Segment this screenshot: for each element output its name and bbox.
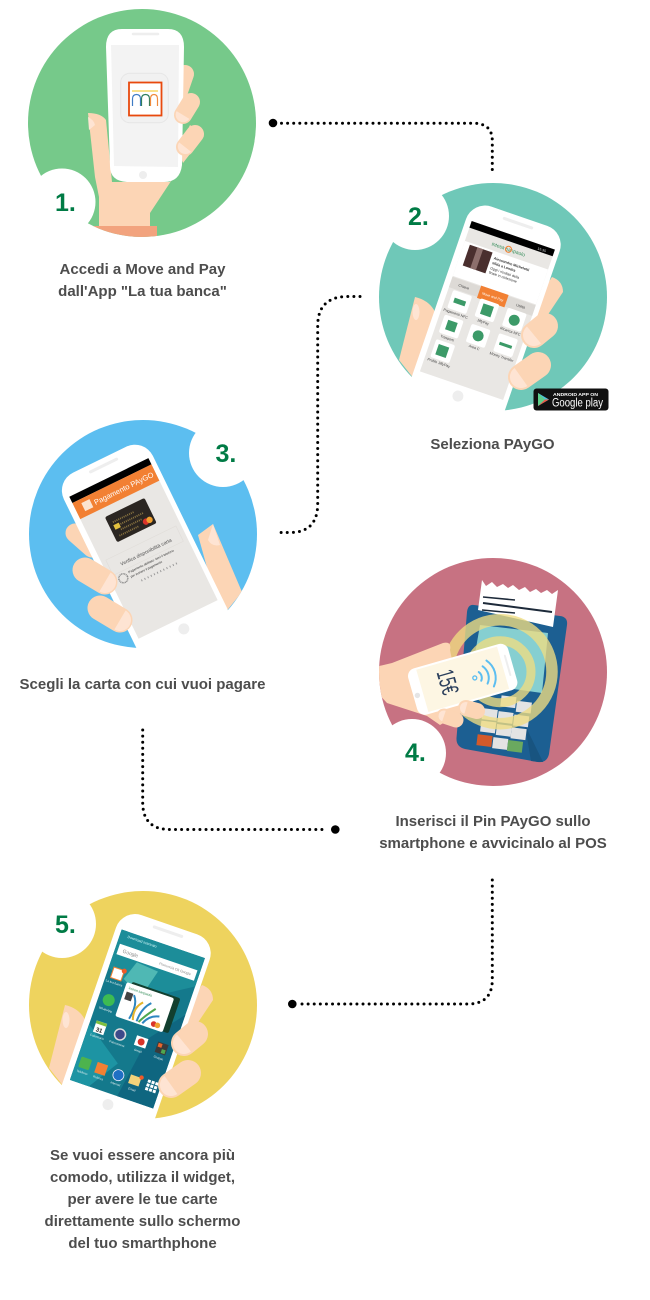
Google Play badge: Google play: [552, 398, 603, 410]
phone with app screen: Area C: [468, 344, 480, 352]
connector: step 1 to step 2: [269, 119, 492, 170]
caption 5: comodo, utilizza il widget,: [50, 1169, 235, 1186]
front fingers: [160, 1034, 195, 1096]
panel: step 2: [379, 182, 608, 453]
service tiles: [430, 289, 527, 382]
hand palm and sleeve: [88, 113, 204, 237]
contactless rings: [448, 620, 552, 724]
phone with amount: [406, 642, 519, 717]
phone with home screen: Rubrica: [93, 1074, 104, 1082]
phone with app screen: Profilo JiffyPay: [427, 357, 451, 369]
number badge 3: 3.: [216, 440, 236, 468]
phone with card screen: Pagamento abilitato: tieni il telefono: [128, 548, 175, 574]
front fingers: [85, 570, 131, 631]
phone with app screen: Utilità: [516, 303, 525, 310]
fingerprint note: [117, 572, 129, 584]
phone with home screen: WhatsApp: [98, 1005, 113, 1014]
front fingers: [510, 326, 545, 388]
caption 5: Se vuoi essere ancora più: [50, 1147, 235, 1164]
phone with home screen: Download scaricato: [127, 935, 157, 949]
payment card: [105, 498, 157, 542]
Google Play badge: ANDROID APP ON: [553, 392, 598, 397]
tabs: [449, 277, 536, 316]
phone with app screen: JiffyPay: [476, 318, 490, 326]
keypad: [476, 693, 532, 753]
number badge 4: [378, 719, 446, 787]
panel: step 3: [20, 419, 265, 693]
phone with app screen: [404, 200, 566, 430]
phone with home screen: Internet: [110, 1080, 121, 1087]
phone with app screen: Pagamenti NFC: [443, 308, 469, 320]
phone: [106, 29, 184, 182]
phone with card screen: per avviare il pagamento: [130, 560, 163, 579]
phone with home screen: La tua banca: [105, 978, 123, 988]
phone with app screen: Alessandro Michelotti: [493, 256, 530, 272]
number badge 4: 4.: [405, 739, 426, 767]
caption 4: smartphone e avvicinalo al POS: [379, 835, 607, 852]
caption 4: [379, 813, 607, 852]
front fingers: [176, 102, 195, 154]
connector: step 3 to step 4: [143, 730, 340, 834]
caption 5: del tuo smarthphone: [68, 1235, 217, 1252]
caption 1: Accedi a Move and Pay: [60, 261, 226, 278]
caption 5: per avere le tue carte: [67, 1191, 218, 1208]
thumb and back finger: [399, 277, 563, 384]
thumb and back finger: [49, 985, 213, 1092]
caption 1: [58, 261, 227, 300]
phone with home screen: Calendario: [89, 1033, 105, 1041]
phone with home screen: Gruppo: [153, 1054, 164, 1062]
number badge 1: 1.: [55, 189, 76, 217]
phone with home screen: Fotocamera: [109, 1039, 125, 1048]
panel: step 4: [375, 558, 607, 852]
app icons: [91, 965, 188, 1057]
phone with app screen: finale in collezione: [488, 271, 517, 284]
caption 4: Inserisci il Pin PAyGO sullo: [395, 813, 591, 830]
POS terminal: [456, 605, 567, 762]
card widget: intesa sanpaolo: [128, 986, 153, 998]
thumb and back finger: [75, 524, 242, 613]
panel: step 5: [28, 890, 257, 1252]
blue circle: [29, 420, 257, 648]
number badge 5: 5.: [55, 911, 76, 939]
dock icons: [78, 1055, 159, 1094]
phone with app screen: sfida a Londra: [492, 261, 517, 273]
number badge 3: [189, 419, 257, 487]
phone with app screen: 15:35: [537, 247, 547, 253]
number badge 2: [381, 182, 449, 250]
card caption: [106, 526, 183, 575]
phone with app screen: Ricarica NFC: [500, 326, 521, 337]
connector: step 2 to step 3: [277, 296, 360, 532]
phone with card screen: [55, 438, 236, 669]
rose circle: [379, 558, 607, 786]
phone with app screen: Money Transfer: [489, 351, 515, 363]
phone with card screen: Verifica disponibilità carta: [120, 537, 173, 568]
phone with app screen: Chiave: [458, 283, 470, 291]
front fingers: [439, 702, 477, 721]
contactless icon: [469, 659, 499, 691]
news block: [453, 241, 548, 304]
orange app bar: [72, 464, 159, 519]
caption 5: [45, 1147, 240, 1252]
number badge 5: [28, 890, 96, 958]
phone with home screen: Email: [128, 1086, 136, 1093]
Google Play badge: [534, 388, 608, 410]
green circle: [28, 9, 256, 237]
connector: step 4 to step 5: [288, 880, 492, 1008]
phone with home screen: Google: [122, 949, 139, 960]
search bar: [116, 944, 198, 981]
yellow circle: [29, 891, 257, 1119]
teal circle: [379, 183, 607, 411]
phone with home screen: Gmail: [134, 1048, 143, 1054]
phone with home screen: [54, 909, 216, 1138]
receipt: [478, 580, 558, 627]
app icons: 31: [95, 1027, 104, 1035]
app header: intesa sanpaolo: [491, 241, 526, 259]
phone with app screen: Oggi i risultati della: [490, 266, 520, 280]
amount: 15€: [431, 667, 464, 698]
phone with home screen: Pronuncia Ok Google: [159, 962, 192, 976]
panel: step 1: [28, 9, 256, 300]
caption 5: direttamente sullo schermo: [45, 1213, 240, 1230]
number badge 1: [28, 168, 96, 236]
back finger: [176, 74, 185, 100]
caption 2: Seleziona PAyGO: [430, 436, 555, 453]
number badge 2: 2.: [408, 203, 429, 231]
card widget: [115, 980, 180, 1034]
caption 3: Scegli la carta con cui vuoi pagare: [20, 676, 265, 693]
caption 1: dall'App "La tua banca": [58, 283, 227, 300]
phone with card screen: Pagamento PAyGO: [93, 470, 155, 507]
phone with app screen: Move and Pay: [481, 291, 504, 303]
hand: [379, 642, 460, 725]
phone with home screen: Telefono: [76, 1069, 88, 1076]
phone with app screen: Trasporti: [440, 334, 455, 343]
app icon: La tua banca: [121, 73, 168, 123]
